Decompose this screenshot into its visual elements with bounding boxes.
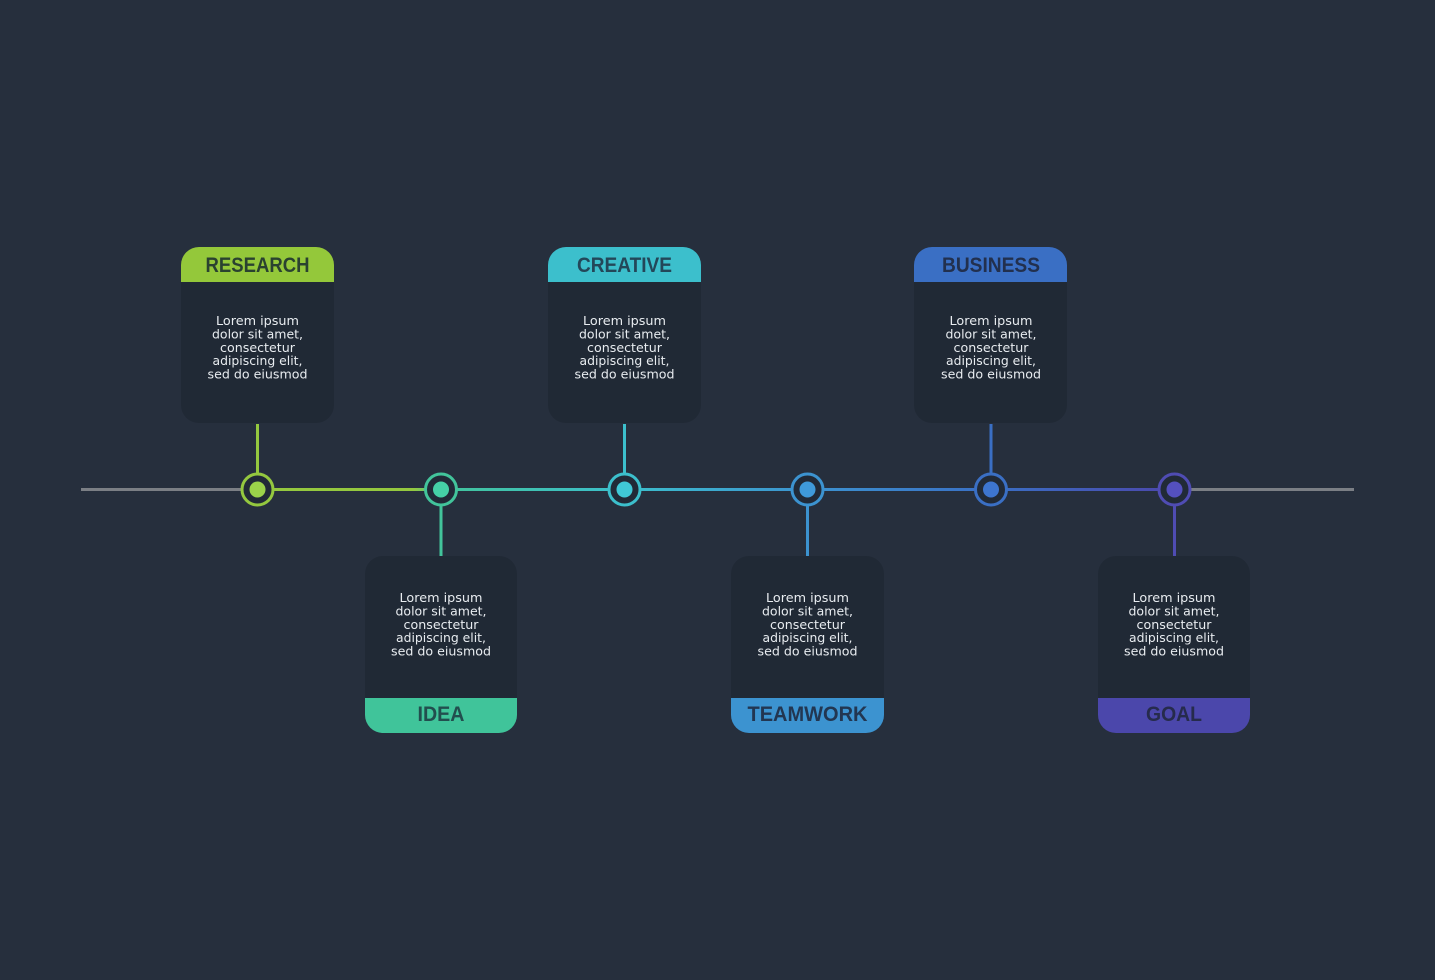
text: research body: sed do eiusmod [208,367,308,382]
text: idea body: sed do eiusmod [391,644,491,659]
text: creative body: sed do eiusmod [574,367,674,382]
text: teamwork body: adipiscing elit, [762,630,852,645]
heading: goal: GOAL [1146,703,1202,726]
panel: creative [548,247,701,423]
heading: business: BUSINESS [942,254,1040,277]
text: research body [208,313,308,382]
marker: creative [609,424,640,505]
heading: idea: IDEA [418,703,464,726]
heading: teamwork: TEAMWORK [748,703,868,726]
heading: research: RESEARCH [206,254,310,277]
text: teamwork body: dolor sit amet, [762,603,853,618]
text: goal body: adipiscing elit, [1129,630,1219,645]
text: creative body: Lorem ipsum [583,313,666,328]
text: teamwork body: Lorem ipsum [766,590,849,605]
text: teamwork body: consectetur [770,617,846,632]
text: business body: consectetur [954,340,1029,355]
text: goal body: Lorem ipsum [1132,590,1216,605]
text: idea body: dolor sit amet, [396,603,486,618]
text: goal body: sed do eiusmod [1124,644,1224,659]
text: idea body: Lorem ipsum [400,590,482,605]
text: idea body: adipiscing elit, [396,630,486,645]
text: research body: adipiscing elit, [212,353,302,368]
heading: creative: CREATIVE [577,254,672,277]
text: research body: Lorem ipsum [216,313,299,328]
marker: teamwork [792,474,823,556]
text: idea body [391,590,491,659]
text: idea body: consectetur [404,617,479,632]
marker: goal [1159,474,1190,556]
footer: idea [365,698,517,733]
panel: research [181,247,334,423]
timeline axis [81,488,1354,491]
panel: goal [1098,556,1250,733]
text: goal body [1124,590,1224,659]
text: business body [941,313,1041,382]
header: research [181,247,334,282]
text: creative body: adipiscing elit, [580,353,670,368]
text: business body: adipiscing elit, [946,353,1036,368]
text: business body: sed do eiusmod [941,367,1041,382]
text: creative body: dolor sit amet, [579,326,670,341]
text: goal body: dolor sit amet, [1128,603,1220,618]
text: business body: dolor sit amet, [946,326,1036,341]
text: teamwork body: sed do eiusmod [758,644,858,659]
header: creative [548,247,701,282]
marker: idea [426,474,456,556]
text: research body: dolor sit amet, [212,326,303,341]
text: teamwork body [758,590,858,659]
text: business body: Lorem ipsum [950,313,1032,328]
text: creative body: consectetur [587,340,663,355]
panel: teamwork [731,556,884,733]
text: creative body [574,313,674,382]
marker: research [242,424,273,505]
panel: business [914,247,1067,423]
panel: idea [365,556,517,733]
marker: business [976,424,1006,505]
header: business [914,247,1067,282]
footer: teamwork [731,698,884,733]
footer: goal [1098,698,1250,733]
text: goal body: consectetur [1136,617,1212,632]
text: research body: consectetur [220,340,296,355]
